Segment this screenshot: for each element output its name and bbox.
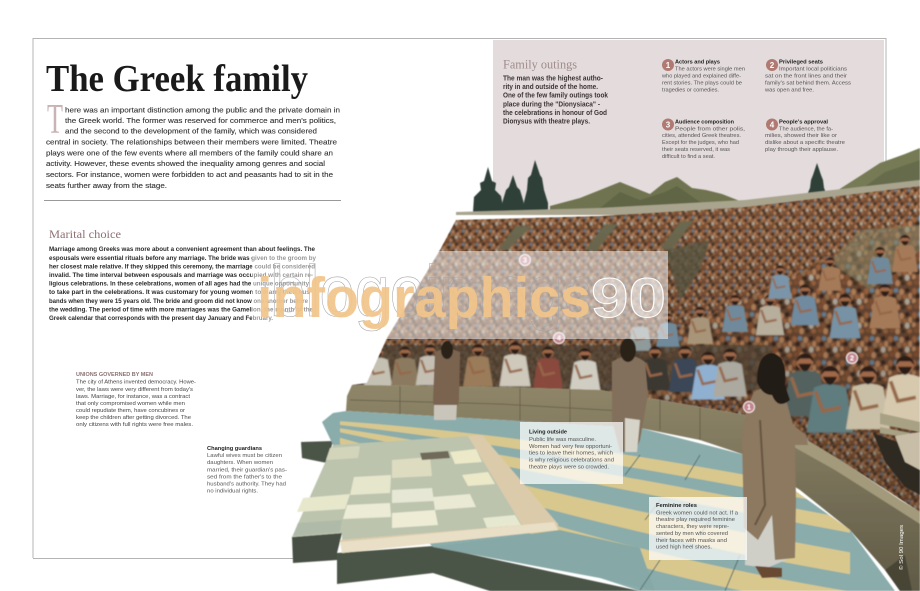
intro text: plays were one of the few events where all members of the family could share an: [46, 148, 333, 158]
item 4: people's approval: The audience, the fa-: [779, 126, 833, 132]
callout: living outside: [520, 422, 623, 484]
panel: family outings text: One of the few family outings took: [503, 93, 608, 100]
text block: unions governed by men: ver, the laws were very different from today's: [76, 387, 193, 393]
item 3: audience composition: People from other polis,: [675, 126, 746, 132]
intro text: the Greek world. The former was reserved for commerce and men's politics,: [65, 116, 336, 125]
text block: unions governed by men: UNIONS GOVERNED BY MEN: [76, 372, 153, 378]
panel: marital choice: to take part in the celebrations. It was customary for young women to marry their hus-: [49, 289, 312, 296]
text block: changing guardians: Lawful wives must be citizen: [207, 453, 282, 459]
item 3: audience composition: cities, attended Greek theatres.: [662, 133, 741, 139]
item 1: actors and plays: tragedies or comedies.: [662, 87, 719, 93]
theatre back wall: [456, 180, 920, 215]
callout: feminine roles: used high heel shoes.: [656, 545, 712, 551]
item 2: privileged seats: was open and free.: [764, 87, 814, 93]
actor left: [433, 341, 460, 420]
badge 1: 1: [666, 61, 671, 70]
item 1: actors and plays: [661, 59, 745, 93]
panel: marital choice: Marriage among Greeks was more about a convenient agreement than about feelings. The: [49, 246, 316, 253]
item 1: actors and plays: Actors and plays: [675, 60, 721, 66]
item 3: audience composition: Except for the judges, who had: [662, 140, 739, 146]
panel: family outings text: The man was the highest autho-: [503, 76, 604, 82]
text block: changing guardians: [207, 446, 287, 495]
intro text: and the second to the development of the family, which was considered: [65, 126, 317, 136]
item 4: people's approval: dislike about a specific theatre: [765, 140, 845, 146]
orchestra retaining wall: [346, 385, 920, 591]
callout: feminine roles: Greek women could not act. If a: [656, 510, 739, 516]
badge 3: 3: [666, 120, 671, 130]
item 2: privileged seats: Privileged seats: [779, 60, 824, 66]
text block: unions governed by men: keep the children after getting divorced. The: [76, 415, 191, 421]
number marker 4: 4: [557, 336, 561, 342]
text block: unions governed by men: only citizens with full rights were free males.: [76, 422, 193, 428]
panel: marital choice: her closest male relative. If they skipped this ceremony, the marriage could be considered: [49, 263, 315, 270]
item 2: privileged seats: Important local politicians: [779, 66, 847, 72]
callout: living outside: Living outside: [529, 430, 568, 436]
panel: marital choice: Greek calendar that corresponds with the present day January and February.: [49, 315, 273, 322]
callout: living outside: ties to leave their homes, which: [529, 451, 613, 457]
panel: marital choice: [49, 227, 317, 322]
number marker 3: 3: [523, 258, 527, 264]
front rows of spectators: [352, 235, 920, 433]
badge 2: 2: [770, 61, 775, 70]
drop cap: T: [47, 97, 63, 143]
title: The Greek family: [46, 58, 308, 100]
text block: unions governed by men: The city of Athens invented democracy. Howe-: [76, 380, 196, 386]
item 3: audience composition: [662, 118, 746, 160]
panel: family outings text: the celebrations in honour of God: [503, 110, 607, 117]
callout: feminine roles: theatre play required feminine: [656, 517, 735, 523]
badge 4: 4: [770, 120, 775, 130]
text block: changing guardians: married, their guardian's pas-: [207, 467, 287, 473]
panel: family outings text: rity in and outside of the home.: [503, 84, 598, 91]
outlined watermark text: blogoimage: [270, 252, 598, 332]
stone steps right: [873, 433, 920, 495]
floor side (dark stone edge): [292, 441, 640, 591]
text block: changing guardians: no individual rights.: [207, 489, 258, 495]
number marker 2: 2: [850, 356, 854, 362]
item 3: audience composition: difficult to find a seat.: [662, 154, 715, 160]
intro text: seats further away from the stage.: [46, 181, 167, 190]
item 4: people's approval: People's approval: [779, 120, 828, 126]
callout: feminine roles: Feminine roles: [656, 503, 698, 509]
number marker 4: [554, 332, 564, 344]
number marker 1: 1: [747, 404, 751, 412]
text block: unions governed by men: could repudiate them, have concubines or: [76, 408, 185, 414]
actor centre: [612, 338, 648, 452]
panel: marital choice: bands when they were 15 years old. The bride and groom did not know one another before: [49, 298, 309, 305]
item 1: actors and plays: who played and explained diffe-: [661, 73, 741, 79]
callout: feminine roles: their faces with masks and: [656, 538, 727, 544]
item 2: privileged seats: family's sat behind them. Access: [765, 80, 851, 86]
item 3: audience composition: their seats reserved, it was: [662, 147, 730, 153]
trees: [473, 160, 827, 212]
item 1: actors and plays: The actors were single men: [675, 66, 745, 72]
floor stripes: [320, 405, 920, 591]
panel: marital choice: ligious celebrations. In these celebrations, women of all ages had the unique opportunity: [49, 281, 310, 288]
watermark box: [252, 251, 668, 339]
intro rule: [44, 200, 341, 201]
callout: feminine roles: characters, they were repre-: [656, 524, 729, 530]
orange watermark text: infographics: [257, 266, 591, 330]
number marker 2: [846, 352, 858, 364]
actor foreground: [742, 353, 808, 578]
watermark: [257, 252, 666, 332]
copyright: © Sol 90 Images: [898, 525, 905, 570]
callout: feminine roles: sented by men who covered: [656, 531, 728, 537]
item 4: people's approval: milies, showed their like or: [765, 133, 837, 139]
callout: feminine roles: [649, 497, 747, 560]
intro text: sectors. For instance, women were forbidden to act and peasants had to sit in the: [46, 170, 333, 179]
text block: changing guardians: husband's authority. They had: [207, 482, 286, 488]
text block: changing guardians: daughters. When women: [207, 460, 273, 466]
callout: living outside: is why religious celebrations and: [529, 458, 614, 464]
callout: living outside: Public life was masculine.: [529, 437, 596, 443]
item 2: privileged seats: sat on the front lines and their: [765, 73, 847, 79]
panel: family outings text: Dionysus with theatre plays.: [503, 118, 590, 125]
intro text: [46, 97, 340, 190]
white watermark number: 90: [591, 266, 666, 329]
item 3: audience composition: Audience composition: [675, 120, 734, 126]
panel: marital choice: the wedding. The period of time with more marriages was the Gamelion, the month of the: [49, 306, 314, 313]
text block: changing guardians: Changing guardians: [207, 446, 263, 452]
intro text: here was an important distinction among the public and the private domain in: [65, 106, 340, 114]
item 4: people's approval: [765, 118, 845, 153]
heading: family outings: Family outings: [503, 56, 577, 72]
text block: changing guardians: sed from the father's to the: [207, 475, 282, 481]
text block: unions governed by men: laws. Marriage, for instance, was a contract: [76, 394, 190, 400]
number marker 1: [744, 402, 754, 412]
mountains: [550, 148, 920, 214]
item 1: actors and plays: rent stories. The plays could be: [662, 80, 742, 86]
marble stage: [292, 435, 558, 553]
crowd: [350, 180, 920, 530]
item 4: people's approval: play through their applause.: [765, 147, 838, 153]
number marker 3: [520, 254, 530, 266]
panel: marital choice: espousals were essential rituals before any marriage. The bride was given to the groom by: [49, 255, 317, 262]
panel: marital choice: invalid. The time interval between espousals and marriage was occupied with certain re-: [49, 272, 313, 279]
panel: family outings background: [493, 40, 884, 212]
callout: living outside: Women had very few opportuni-: [529, 444, 612, 450]
item 2: privileged seats: [764, 59, 851, 93]
intro text: central in society. The relationships between their members were limited. Theatre: [46, 138, 337, 146]
panel: family outings text: place during the "Dionysiaca" -: [503, 101, 601, 108]
text block: unions governed by men: [76, 372, 196, 428]
intro text: activity. However, these events showed the inequality among genres and social: [46, 159, 325, 168]
heading: marital choice: Marital choice: [49, 227, 121, 241]
callout: living outside: theatre plays were so crowded.: [529, 465, 609, 471]
panel: family outings text: [503, 56, 608, 125]
illustration: Greek theatre: [292, 148, 920, 591]
text block: unions governed by men: that only compromised women while men: [76, 401, 185, 407]
